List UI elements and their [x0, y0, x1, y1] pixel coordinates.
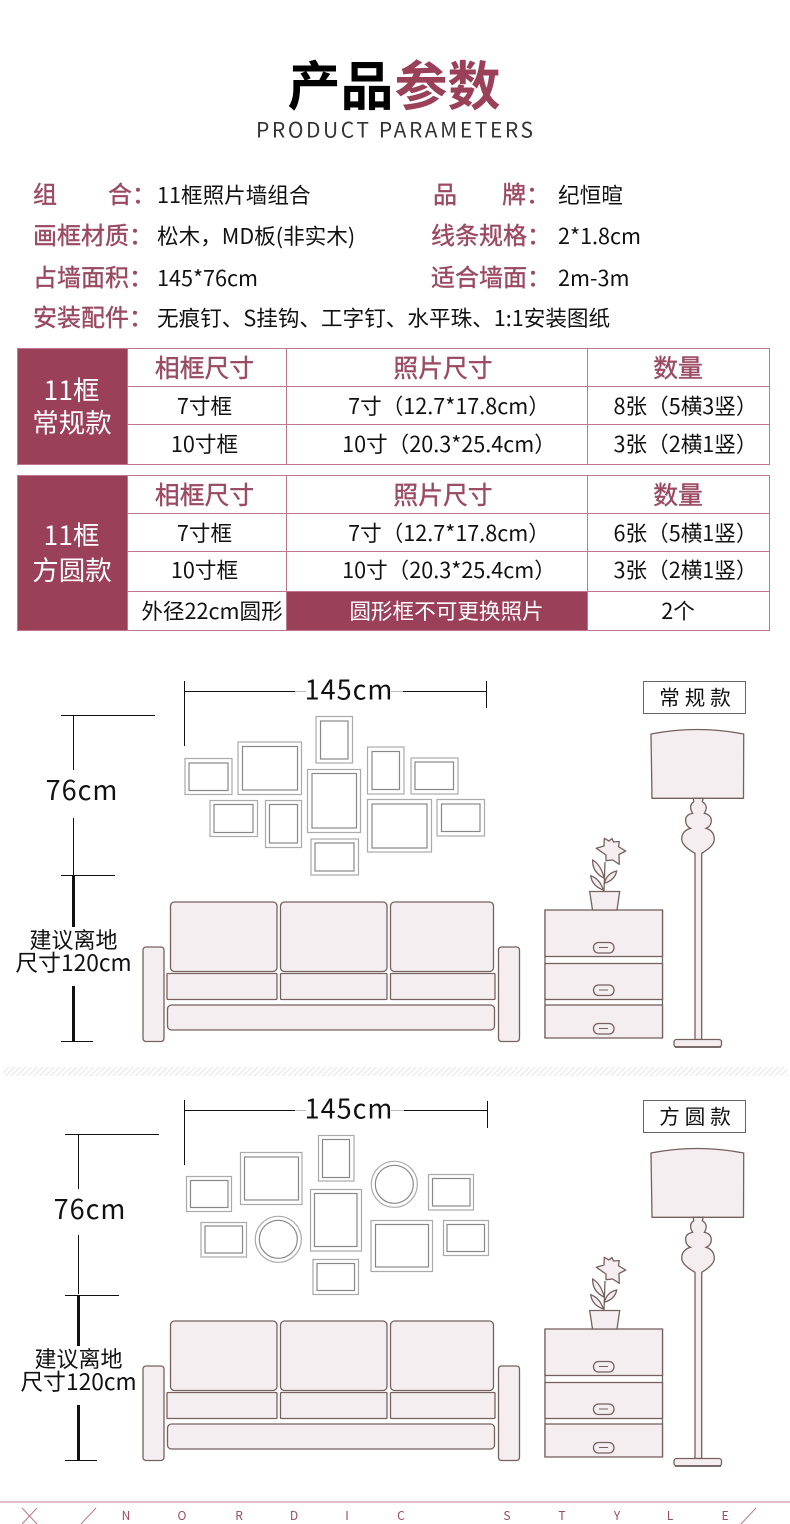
spec: brand [433, 175, 623, 210]
header row [155, 349, 703, 385]
height dimension 76cm: 76cm [54, 1188, 126, 1227]
spec: combination: 合： [108, 175, 156, 210]
spec: accessories: 安装配件： [33, 298, 153, 333]
title: 参数 [394, 45, 500, 121]
sofa [143, 902, 520, 1042]
floor distance 120cm: 建议离地 [29, 923, 118, 955]
footer letters [122, 1507, 729, 1524]
header row [155, 476, 703, 512]
frame 3 [316, 716, 352, 763]
row: 10 inch: 10寸（20.3*25.4cm） [342, 428, 556, 459]
side cell [17, 348, 127, 465]
header row: 数量 [653, 476, 703, 512]
row: 7 inch: 8张（5横3竖） [614, 390, 757, 421]
header row: 相框尺寸 [155, 349, 254, 385]
photo frames [186, 1136, 488, 1294]
spec: material [33, 216, 355, 251]
frame 8 [308, 770, 360, 832]
footer letters: T [558, 1507, 566, 1524]
row: 7 inch: 7寸框 [177, 517, 232, 548]
row: 10 inch: 10寸（20.3*25.4cm） [342, 554, 556, 585]
footer letters: E [721, 1507, 729, 1524]
spec: suitable wall: 适合墙面： [431, 258, 551, 293]
frame 8 [310, 1190, 362, 1251]
title: 产品 [288, 45, 394, 121]
height dimension 76cm [54, 1134, 159, 1296]
floor lamp [651, 1148, 744, 1466]
row: 7 inch [177, 390, 757, 421]
frame 6 [201, 1222, 246, 1257]
side cell [17, 475, 127, 631]
row: 7 inch: 7寸框 [177, 390, 232, 421]
row: 10 inch [171, 554, 757, 585]
footer letters: I [345, 1507, 349, 1524]
icon: left slash [81, 1508, 96, 1524]
header row: 相框尺寸 [155, 476, 254, 512]
frame 7 [266, 800, 302, 848]
footer letters: Y [613, 1507, 621, 1524]
spec: brand: 纪恒暄 [558, 179, 623, 210]
spec: line size [431, 216, 641, 251]
subtitle: PRODUCT PARAMETERS [256, 114, 536, 144]
diagram: regular layout [15, 668, 746, 1047]
width dimension 145cm [184, 668, 487, 746]
row: 7 inch: 6张（5横1竖） [614, 517, 757, 548]
footer letters: S [503, 1507, 511, 1524]
spec: accessories [33, 298, 610, 333]
side cell: 11框 [44, 514, 99, 553]
side cell: 常规款 [32, 402, 112, 440]
style label: 常规款 [659, 681, 736, 711]
spec: combination [33, 175, 311, 210]
row: round frame [141, 595, 695, 626]
row: 10 inch: 3张（2横1竖） [614, 554, 757, 585]
width dimension 145cm [184, 1088, 488, 1165]
header row: 照片尺寸 [393, 476, 493, 512]
spec: material: 松木，MD板(非实木) [157, 220, 355, 251]
frame 1 [186, 1176, 232, 1212]
header row: 数量 [653, 349, 703, 385]
frame 2 [238, 742, 302, 794]
row: 10 inch: 10寸框 [171, 428, 238, 459]
frame 1 [185, 758, 232, 794]
spec: combination: 组 [33, 175, 57, 210]
width dimension 145cm: 145cm [305, 1088, 393, 1126]
highlighted cell: 圆形框不可更换照片 [349, 595, 544, 626]
photo frames [185, 716, 484, 875]
side cell: 11框 [44, 369, 99, 408]
frame 3 [318, 1136, 354, 1181]
floor distance 120cm [15, 875, 132, 1042]
frame 5 [411, 758, 458, 794]
width dimension 145cm: 145cm [305, 668, 393, 708]
row: 7 inch: 7寸（12.7*17.8cm） [348, 390, 550, 421]
table: regular style [17, 348, 770, 465]
side cell: 方圆款 [32, 549, 112, 588]
table: square and round style [17, 475, 770, 631]
floor distance 120cm [20, 1295, 137, 1460]
row: 10 inch [171, 428, 757, 459]
row: 10 inch: 3张（2横1竖） [614, 428, 757, 459]
style label: 方圆款 [659, 1100, 736, 1130]
frame 6 [210, 800, 258, 836]
diagram: square and round layout [20, 1088, 746, 1466]
round frame 1 [371, 1161, 417, 1207]
frame 9 [368, 800, 432, 852]
row: 7 inch [177, 517, 757, 548]
frame 10 [444, 1220, 488, 1256]
footer: nordic style strip [0, 1502, 790, 1524]
height dimension 76cm [46, 715, 155, 876]
spec: wall area [33, 258, 258, 293]
footer letters: R [235, 1507, 243, 1524]
spec: suitable wall [431, 258, 629, 293]
potted flower [590, 1257, 626, 1329]
footer letters: C [397, 1507, 405, 1524]
frame 11 [313, 1260, 358, 1294]
frame 9 [371, 1220, 432, 1272]
floor distance 120cm: 尺寸120cm [20, 1364, 137, 1397]
spec: line size: 线条规格： [431, 216, 551, 251]
icon: right slash [741, 1508, 756, 1524]
spec: combination: 11框照片墙组合 [157, 179, 311, 210]
floor distance 120cm: 尺寸120cm [15, 945, 132, 978]
round frame 2 [255, 1216, 301, 1262]
side cabinet [545, 1329, 662, 1457]
icon: cross mark [22, 1508, 37, 1524]
title [288, 45, 500, 121]
header row: 照片尺寸 [393, 349, 493, 385]
frame 5 [428, 1174, 474, 1210]
spec: accessories: 无痕钉、S挂钩、工字钉、水平珠、1:1安装图纸 [157, 302, 610, 333]
spec: suitable wall: 2m-3m [558, 262, 629, 293]
spec: line size: 2*1.8cm [558, 220, 641, 251]
style label [644, 681, 746, 714]
spec: material: 画框材质： [33, 216, 153, 251]
spec: brand: 品 [433, 175, 457, 210]
row: 7 inch: 7寸（12.7*17.8cm） [348, 517, 550, 548]
frame 2 [240, 1152, 302, 1204]
sofa [143, 1321, 520, 1460]
parameter list [33, 175, 641, 333]
footer letters: O [178, 1507, 187, 1524]
hatched divider [3, 1067, 787, 1076]
frame 10 [437, 800, 484, 836]
potted flower [590, 838, 626, 910]
frame 11 [311, 839, 358, 875]
style label [644, 1100, 746, 1132]
footer letters: D [290, 1507, 298, 1524]
side cabinet [545, 910, 662, 1038]
footer letters: L [667, 1507, 674, 1524]
spec: wall area: 占墙面积： [33, 258, 153, 293]
row: round frame: 外径22cm圆形 [141, 595, 283, 626]
highlighted cell [287, 591, 588, 631]
row: round frame: 2个 [661, 595, 695, 626]
floor distance 120cm: 建议离地 [34, 1342, 123, 1374]
footer letters: N [122, 1507, 130, 1524]
row: 10 inch: 10寸框 [171, 554, 238, 585]
floor lamp [651, 730, 744, 1047]
height dimension 76cm: 76cm [46, 769, 118, 808]
spec: wall area: 145*76cm [157, 262, 258, 293]
frame 4 [368, 747, 404, 794]
spec: brand: 牌： [502, 175, 550, 210]
